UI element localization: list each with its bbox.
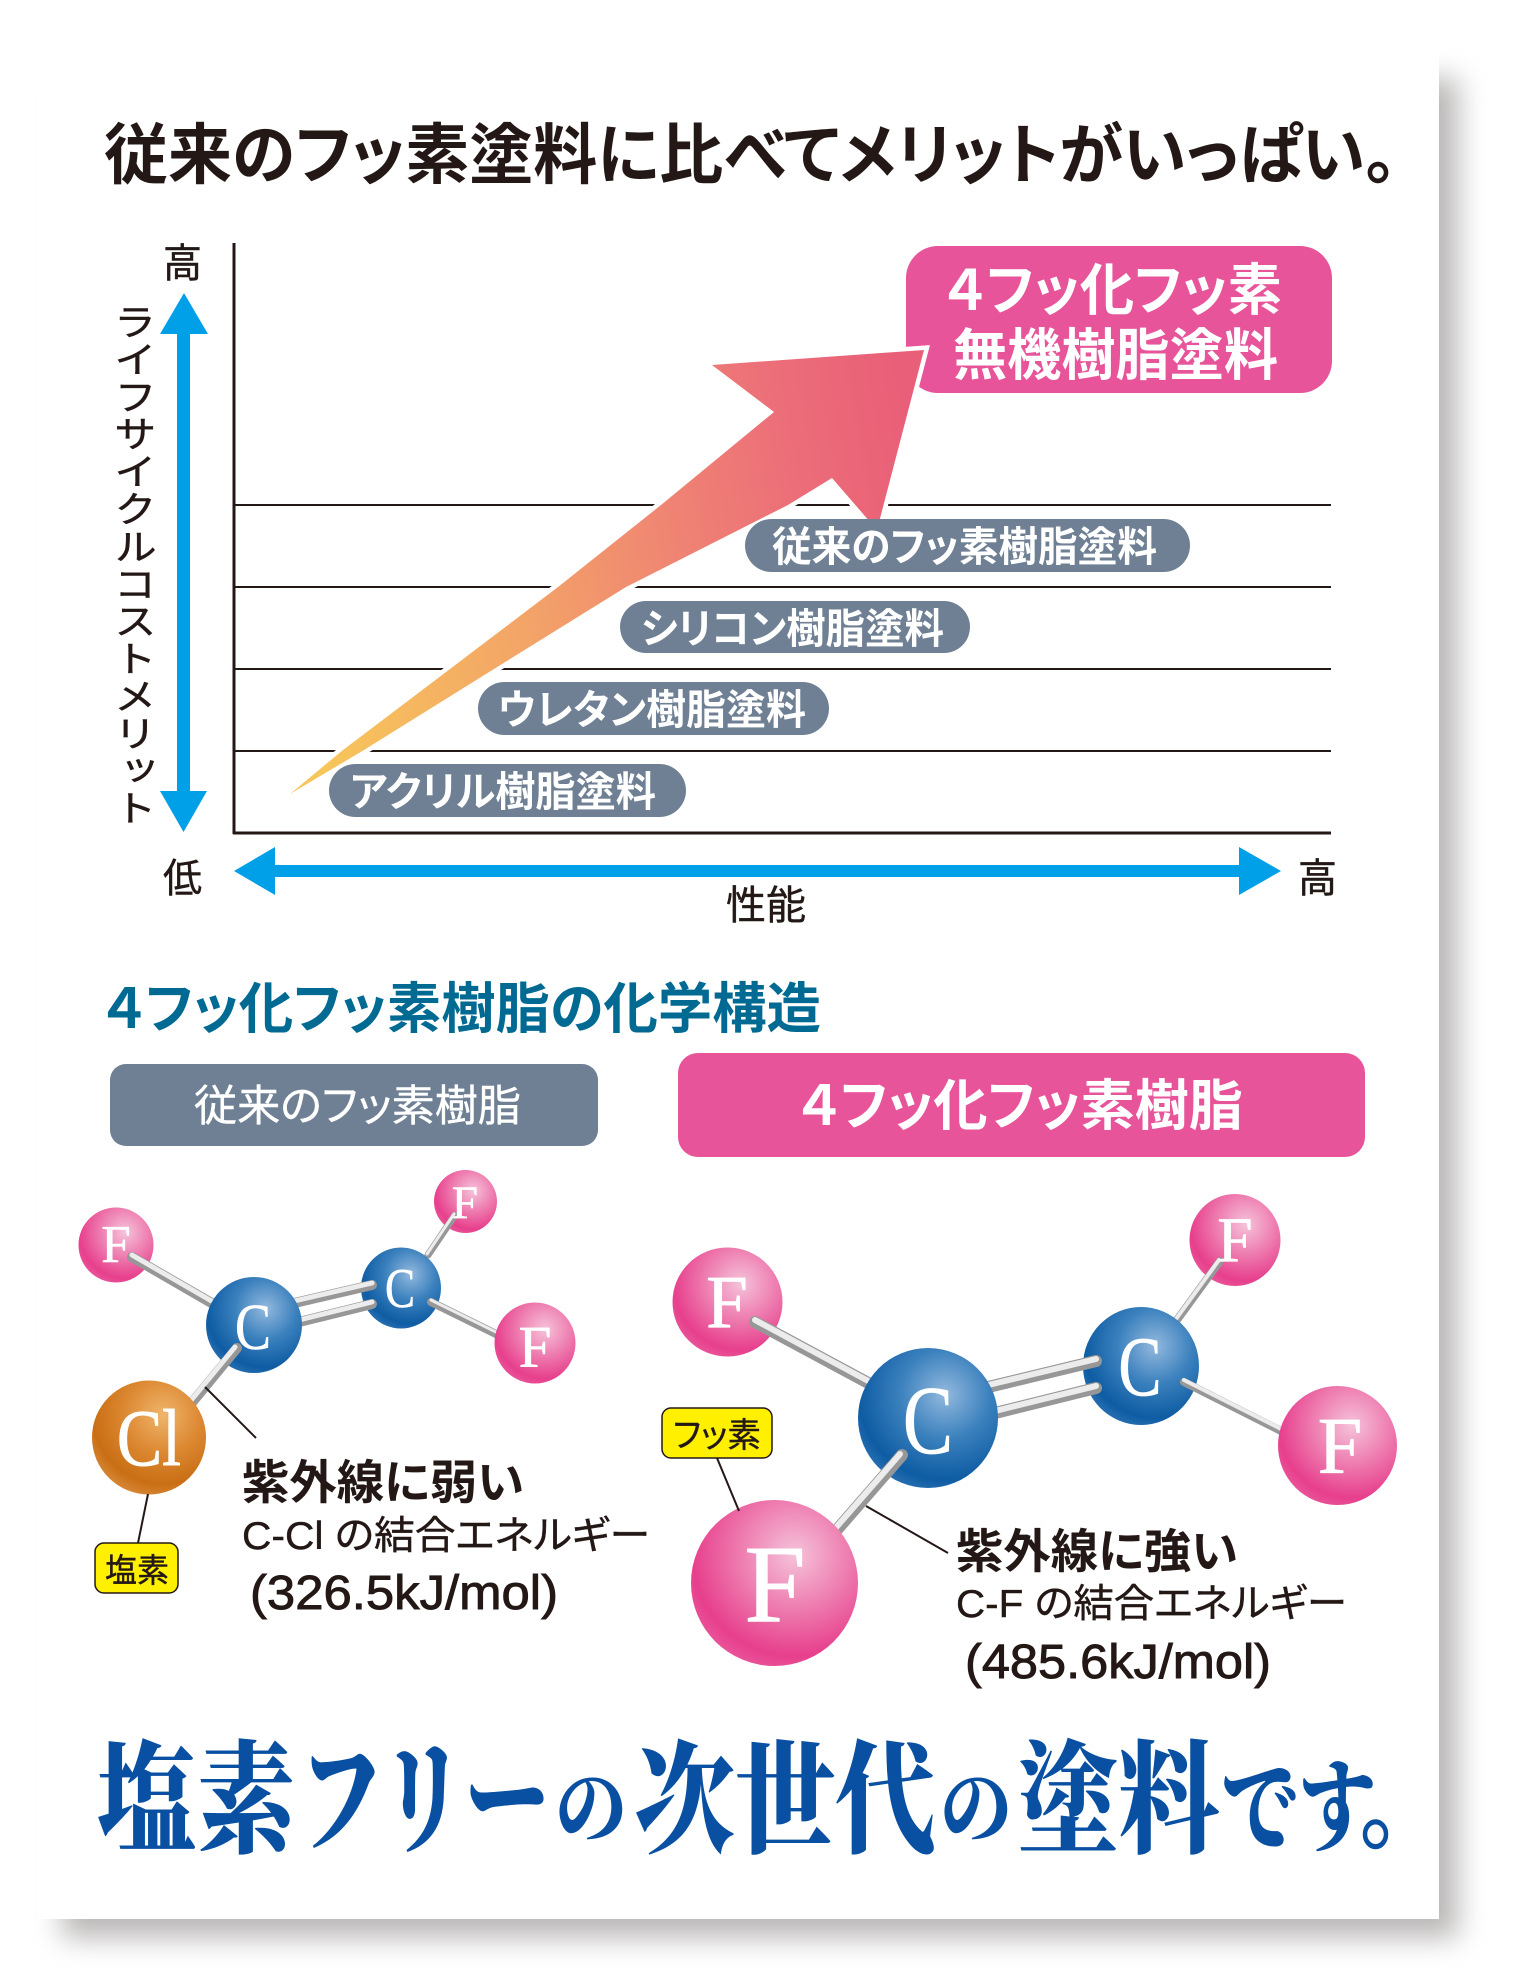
callout: tetrafluoro inorganic resin paint <box>906 246 1332 393</box>
callout: tetrafluoro inorganic resin paint: 無機樹脂塗料 <box>953 324 1278 387</box>
closing headline: フリー <box>299 1703 549 1878</box>
molecule: tetrafluoro resin: C <box>903 1367 953 1475</box>
label: chlorine <box>95 1543 178 1593</box>
pill: acrylic resin paint: アクリル樹脂塗料 <box>350 769 656 815</box>
section heading: chemical structure: ４フッ化フッ素樹脂の化学構造 <box>104 978 821 1040</box>
panel header: tetrafluoro resin: ４フッ化フッ素樹脂 <box>799 1075 1243 1137</box>
y-axis high label: 高 <box>163 242 202 286</box>
label: fluorine: フッ素 <box>673 1417 761 1455</box>
chart axes and grid lines <box>233 243 1331 834</box>
molecule: tetrafluoro resin: F <box>1318 1403 1362 1491</box>
molecule: conventional fluororesin with chlorine <box>78 1170 576 1494</box>
text block: strong against UV: C-F の結合エネルギー <box>956 1583 1347 1626</box>
label: chlorine: 塩素 <box>105 1552 169 1589</box>
molecule: tetrafluoro resin: F <box>1217 1205 1253 1275</box>
molecule: tetrafluoro resin <box>672 1194 1397 1666</box>
panel header: conventional fluororesin: 従来のフッ素樹脂 <box>194 1083 521 1131</box>
molecule: conventional fluororesin with chlorine: Cl <box>117 1395 181 1483</box>
leader lines: tetrafluoro molecule <box>717 1458 948 1553</box>
closing headline: の <box>555 1744 627 1861</box>
molecule: tetrafluoro resin: F <box>706 1261 748 1344</box>
pill: silicone resin paint: シリコン樹脂塗料 <box>641 606 944 652</box>
molecule: conventional fluororesin with chlorine: C <box>385 1258 415 1320</box>
text block: strong against UV: 紫外線に強い <box>956 1525 1238 1578</box>
y-axis low label: 低 <box>163 857 202 901</box>
closing headline: 塩素 <box>97 1703 299 1878</box>
closing headline: 塗料 <box>1018 1703 1219 1878</box>
text block: strong against UV <box>956 1525 1347 1689</box>
molecule: conventional fluororesin with chlorine: F <box>519 1314 551 1380</box>
molecule: conventional fluororesin with chlorine: F <box>452 1177 478 1229</box>
chart: life-cycle cost merit versus performance <box>107 242 1337 928</box>
x-axis high label: 高 <box>1298 857 1337 901</box>
arrow: rising gradient arrow <box>290 350 924 794</box>
y-axis label: ライフサイクルコストメリット <box>107 303 155 826</box>
pill: urethane resin paint: ウレタン樹脂塗料 <box>498 687 806 733</box>
molecule: tetrafluoro resin: F <box>744 1523 806 1645</box>
title: 従来のフッ素塗料に比べてメリットがいっぱい。 <box>104 118 1397 192</box>
pill: conventional fluororesin paint: 従来のフッ素樹脂塗料 <box>772 524 1157 570</box>
closing headline: 。 <box>1360 1725 1445 1869</box>
text block: weak against UV: C-Cl の結合エネルギー <box>242 1515 650 1558</box>
text block: weak against UV <box>242 1456 650 1620</box>
closing headline: の <box>940 1744 1012 1861</box>
molecule: conventional fluororesin with chlorine: F <box>101 1216 131 1274</box>
text block: strong against UV: (485.6kJ/mol) <box>965 1636 1271 1689</box>
x-axis arrow <box>234 847 1281 895</box>
label: fluorine <box>662 1408 772 1458</box>
panel header: tetrafluoro resin <box>678 1053 1365 1157</box>
panel header: conventional fluororesin <box>110 1064 598 1146</box>
text block: weak against UV: (326.5kJ/mol) <box>250 1567 558 1620</box>
molecule: conventional fluororesin with chlorine: C <box>235 1291 271 1364</box>
closing headline: 次世代 <box>634 1703 938 1878</box>
text block: weak against UV: 紫外線に弱い <box>242 1456 524 1509</box>
closing headline <box>97 1703 1445 1878</box>
callout: tetrafluoro inorganic resin paint: ４フッ化フッ素 <box>945 259 1282 322</box>
molecule: tetrafluoro resin: C <box>1118 1320 1162 1414</box>
closing headline: です <box>1221 1728 1376 1872</box>
y-axis arrow <box>160 293 208 832</box>
x-axis label: 性能 <box>726 884 806 928</box>
leader lines: conventional molecule <box>138 1387 256 1543</box>
